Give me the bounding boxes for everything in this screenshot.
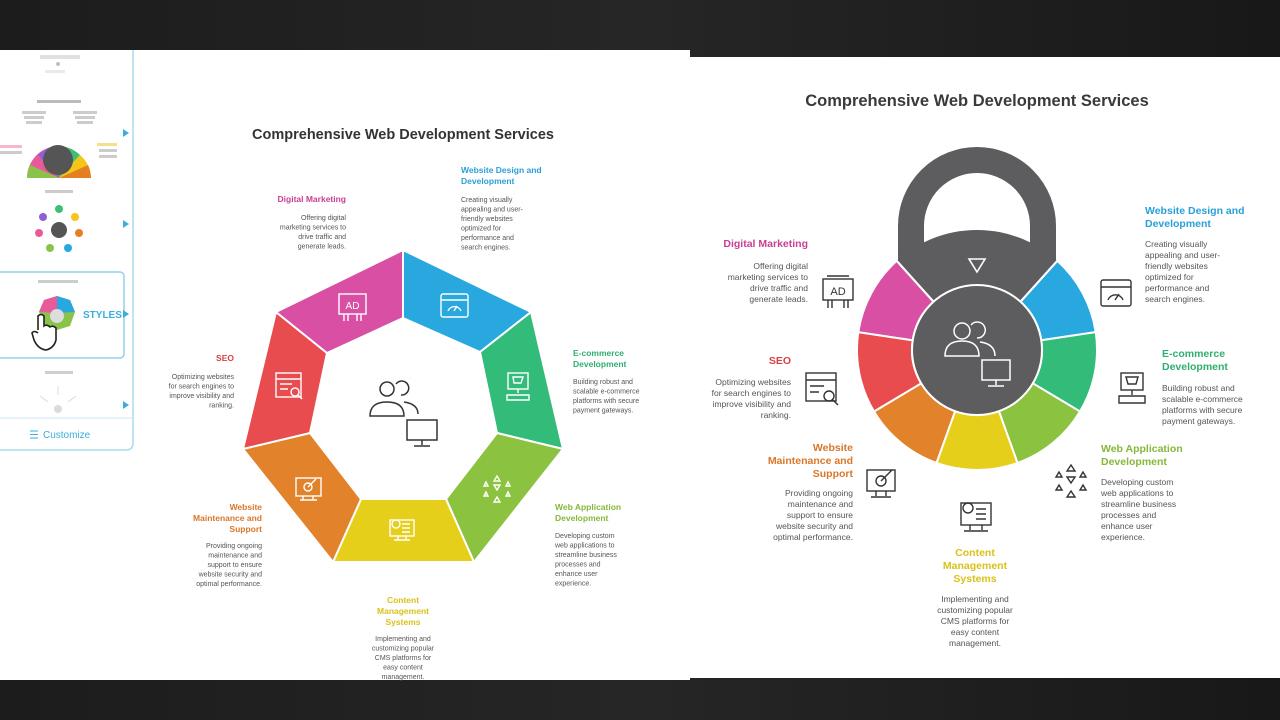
text: SEO (right): ranking. <box>761 410 791 420</box>
text: E-commerce (left) <box>573 348 640 414</box>
text: Maintenance (left): maintenance and <box>208 552 262 560</box>
text: Digital Marketing (right) <box>723 238 808 304</box>
icon: cart monitor <box>507 373 529 400</box>
text: E-commerce (left): E-commerce <box>573 348 624 358</box>
text: SEO (left): Optimizing websites <box>172 374 234 381</box>
text: CMS (left): CMS platforms for <box>375 655 432 662</box>
text: Web Application (right): Web Application <box>1101 443 1183 455</box>
heptagon icons <box>276 294 529 540</box>
text: SEO (left) <box>169 353 234 410</box>
text: Maintenance (right): support to ensure <box>787 510 853 520</box>
text: Maintenance (right) <box>768 442 853 542</box>
text: Web Application (right): streamline business <box>1101 499 1176 509</box>
text: SEO (left): SEO <box>216 353 234 363</box>
thumbnail 3: hub <box>35 190 83 252</box>
text: Website Design (left): Development <box>461 176 515 186</box>
text: E-commerce (left): scalable e-commerce <box>573 388 640 396</box>
text: Maintenance (left): Support <box>229 524 262 534</box>
text: Website Design (left) <box>461 165 542 252</box>
text: Digital Marketing (right): drive traffic and <box>750 283 808 293</box>
thumbnail 1 <box>40 55 80 73</box>
text: Website Design (right): search engines. <box>1145 294 1205 304</box>
text: Maintenance (left): Website <box>230 502 262 512</box>
text: Web Application (right): web applications to <box>1100 488 1174 498</box>
text: Maintenance (left): Maintenance and <box>193 513 262 523</box>
text: Maintenance (right): optimal performance. <box>773 532 853 542</box>
text: SEO (right) <box>712 355 791 420</box>
text: Maintenance (right): website security and <box>775 521 853 531</box>
text: Web Application (left) <box>554 502 621 588</box>
text: CMS (left): easy content <box>383 664 423 672</box>
text: Maintenance (left): Providing ongoing <box>206 543 262 550</box>
text: Web Application (left): enhance user <box>555 571 598 578</box>
text: SEO (right): SEO <box>769 355 791 367</box>
text: CMS (right): CMS platforms for <box>941 616 1009 626</box>
text: Maintenance (left): website security and <box>198 572 262 578</box>
icon: AD billboard: AD <box>830 286 846 298</box>
text: Digital Marketing (left): Offering digital <box>301 215 346 222</box>
text: E-commerce (right): scalable e-commerce <box>1162 394 1243 404</box>
text: E-commerce (right): platforms with secure <box>1162 405 1243 415</box>
text: Maintenance (left) <box>193 502 262 588</box>
text: CMS (right): Implementing and <box>941 594 1009 604</box>
padlock shackle <box>911 160 1043 275</box>
text: Website Design (left): search engines. <box>461 244 510 252</box>
text: Website Design (right): Development <box>1145 218 1211 230</box>
text: CMS (right): Systems <box>953 573 997 585</box>
text: Website Design (left): optimized for <box>461 226 502 232</box>
text: Digital Marketing (left): marketing services to <box>280 224 346 232</box>
chart: heptagon <box>243 250 563 562</box>
text: SEO (right): for search engines to <box>712 388 791 398</box>
text: Maintenance (left): optimal performance. <box>196 581 262 588</box>
icon: network <box>484 476 510 502</box>
text: CMS (left): Management <box>377 606 429 616</box>
thumbnail 2: half wheel <box>0 100 117 178</box>
icon: down triangle <box>969 259 985 272</box>
text: CMS (left): Systems <box>386 617 421 627</box>
title right: Comprehensive Web Development Services <box>805 92 1149 110</box>
text: CMS (left): management. <box>382 674 424 681</box>
text: CMS (right): Management <box>943 560 1008 572</box>
icon: AD billboard: AD <box>346 301 359 312</box>
text: Digital Marketing (left): drive traffic and <box>298 234 346 241</box>
text: Maintenance (right): Providing ongoing <box>785 488 853 498</box>
text: Digital Marketing (left): Digital Marketing <box>278 194 346 204</box>
panel: right padlock infographic <box>690 57 1280 678</box>
text: Maintenance (right): Maintenance and <box>768 455 853 467</box>
icon: AD billboard <box>339 294 366 321</box>
text: Website Design (right): friendly websites <box>1145 261 1208 271</box>
icon: target monitor <box>296 478 321 500</box>
title left: Comprehensive Web Development Services <box>252 127 554 143</box>
text: E-commerce (left): Building robust and <box>573 379 633 386</box>
text: SEO (right): Optimizing websites <box>715 377 791 387</box>
icon: hand pointer <box>32 314 56 350</box>
customize button: Customize <box>43 430 91 441</box>
icon: network <box>1056 465 1086 497</box>
text: Digital Marketing (left): generate leads. <box>298 244 346 250</box>
text: CMS (right): Content <box>955 547 995 559</box>
icon: SEO browser <box>276 373 302 399</box>
text: Website Design (right): optimized for <box>1145 272 1194 282</box>
text: Website Design (left): Website Design and <box>461 165 542 175</box>
text: Web Application (right): Developing custom <box>1101 477 1173 487</box>
text: CMS (right): management. <box>949 638 1001 648</box>
text: Maintenance (right): maintenance and <box>788 499 853 509</box>
text: Website Design (right): Website Design and <box>1145 205 1245 217</box>
text: Web Application (right): experience. <box>1101 532 1145 542</box>
icon: target monitor <box>867 470 895 497</box>
text: E-commerce (right): E-commerce <box>1162 348 1225 360</box>
text: Web Application (left): web applications to <box>554 542 615 550</box>
text: E-commerce (right): Development <box>1162 361 1228 373</box>
text: Maintenance (right): Support <box>813 468 853 480</box>
icon: cart monitor <box>1119 373 1145 403</box>
text: Website Design (right): appealing and user- <box>1145 250 1220 260</box>
text: CMS (right): easy content <box>951 627 1000 637</box>
text: Web Application (left): Developing custom <box>555 533 615 540</box>
text: Web Application (right): Development <box>1101 456 1167 468</box>
icon: people and monitor (center) <box>945 322 1010 386</box>
text: Web Application (left): streamline business <box>555 552 617 559</box>
text: E-commerce (right): payment gateways. <box>1162 416 1235 426</box>
text: Website Design (left): appealing and user- <box>461 206 524 214</box>
text: Digital Marketing (left) <box>278 194 346 250</box>
label: STYLES: STYLES <box>83 310 122 321</box>
text: CMS (left): Content <box>387 595 419 605</box>
icon: browser speed <box>1101 280 1131 306</box>
panel: left editor screenshot <box>0 50 690 681</box>
text: CMS (left) <box>372 595 435 681</box>
text: Website Design (right): Creating visually <box>1145 239 1208 249</box>
text: SEO (left): improve visibility and <box>169 393 234 400</box>
icon: people and monitor (left center) <box>370 381 437 446</box>
text: Web Application (left): Development <box>555 513 609 523</box>
text: CMS (left): Implementing and <box>375 636 431 643</box>
text: Web Application (right) <box>1100 443 1183 542</box>
text: Web Application (right): processes and <box>1101 510 1157 520</box>
text: SEO (right): improve visibility and <box>713 399 791 409</box>
text: Web Application (left): Web Application <box>555 502 621 512</box>
text: Digital Marketing (right): Offering digital <box>753 261 808 271</box>
sidebar: style thumbnails <box>0 50 133 450</box>
text: SEO (left): ranking. <box>209 402 234 410</box>
text: Digital Marketing (right): Digital Marketing <box>723 238 808 250</box>
icon: CMS <box>961 503 991 531</box>
text: SEO (left): for search engines to <box>169 384 234 390</box>
icon: AD billboard <box>823 276 853 308</box>
selected style card <box>0 272 124 358</box>
text: Website Design (right) <box>1145 205 1245 304</box>
outer icons <box>806 276 1145 531</box>
text: E-commerce (right): Building robust and <box>1162 383 1235 393</box>
text: Digital Marketing (right): generate leads. <box>749 294 808 304</box>
text: E-commerce (left): platforms with secure <box>573 398 639 405</box>
text: Web Application (left): experience. <box>555 580 591 588</box>
text: Website Design (left): friendly websites <box>461 216 513 223</box>
text: Digital Marketing (right): marketing services to <box>728 272 808 282</box>
arrows <box>123 129 129 409</box>
icon: SEO browser <box>806 373 838 405</box>
padlock wheel <box>857 230 1097 470</box>
text: Maintenance (right): Website <box>813 442 853 454</box>
text: E-commerce (right) <box>1162 348 1243 426</box>
icon: browser speed <box>441 294 468 317</box>
text: Web Application (left): processes and <box>555 562 601 568</box>
text: E-commerce (left): Development <box>573 359 627 369</box>
text: CMS (right) <box>937 547 1013 648</box>
text: Website Design (left): performance and <box>461 235 514 242</box>
text: E-commerce (left): payment gateways. <box>573 408 633 414</box>
text: Maintenance (left): support to ensure <box>208 562 262 569</box>
text: CMS (left): customizing popular <box>372 646 435 652</box>
text: Web Application (right): enhance user <box>1101 521 1153 531</box>
thumbnail 5 <box>40 371 76 413</box>
text: Website Design (right): performance and <box>1145 283 1210 293</box>
text: Website Design (left): Creating visually <box>461 197 513 204</box>
icon: CMS <box>390 520 414 540</box>
text: CMS (right): customizing popular <box>937 605 1013 615</box>
